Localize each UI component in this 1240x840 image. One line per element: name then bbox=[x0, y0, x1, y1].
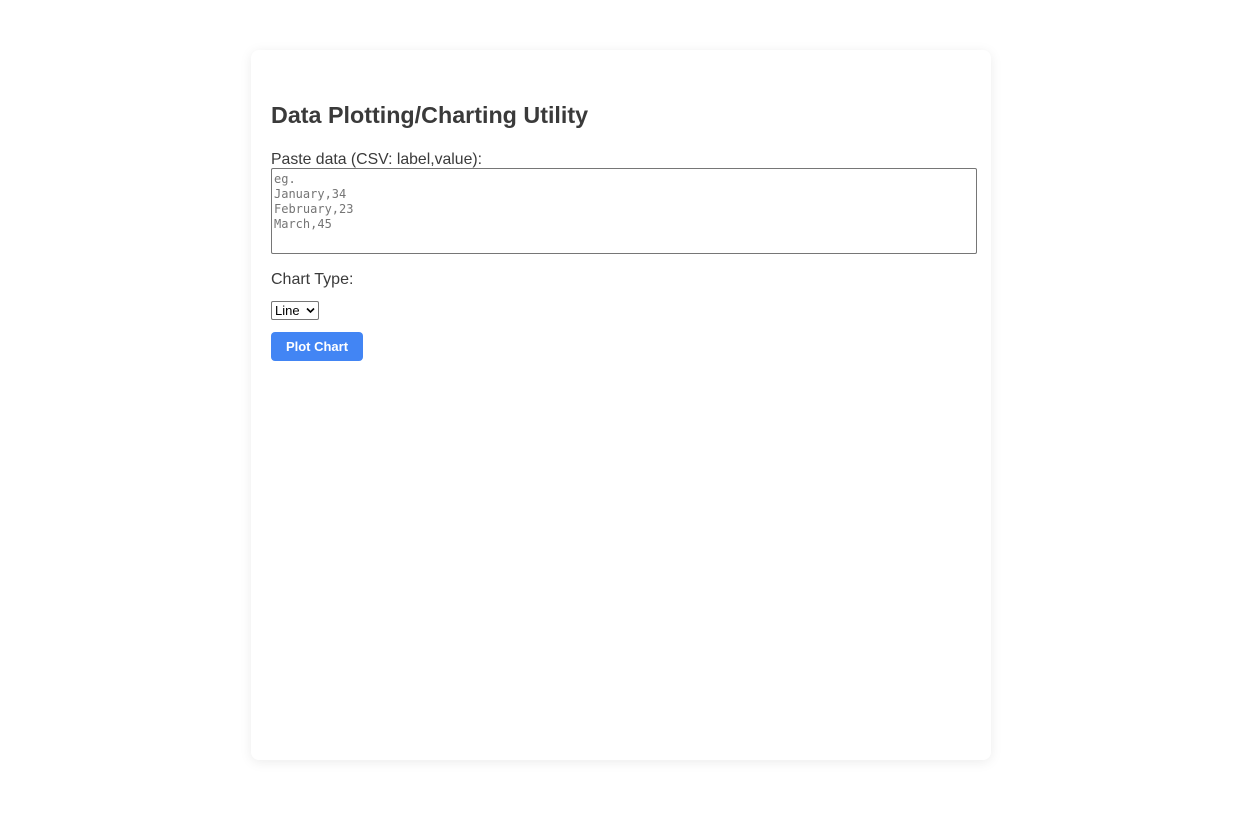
textarea: data input bbox=[271, 168, 977, 254]
textarea: data input: eg. January,34 February,23 March,45 bbox=[274, 172, 353, 231]
button: plot chart bbox=[271, 332, 363, 361]
label: chart type: Chart Type: bbox=[271, 271, 353, 288]
select: chart type bbox=[271, 301, 319, 320]
select: chart type: Line bbox=[275, 303, 300, 318]
button: plot chart: Plot Chart bbox=[286, 339, 348, 354]
panel: main card bbox=[251, 50, 991, 760]
title: Data Plotting/Charting Utility bbox=[271, 102, 588, 128]
label: paste data: Paste data (CSV: label,value): bbox=[271, 151, 482, 168]
